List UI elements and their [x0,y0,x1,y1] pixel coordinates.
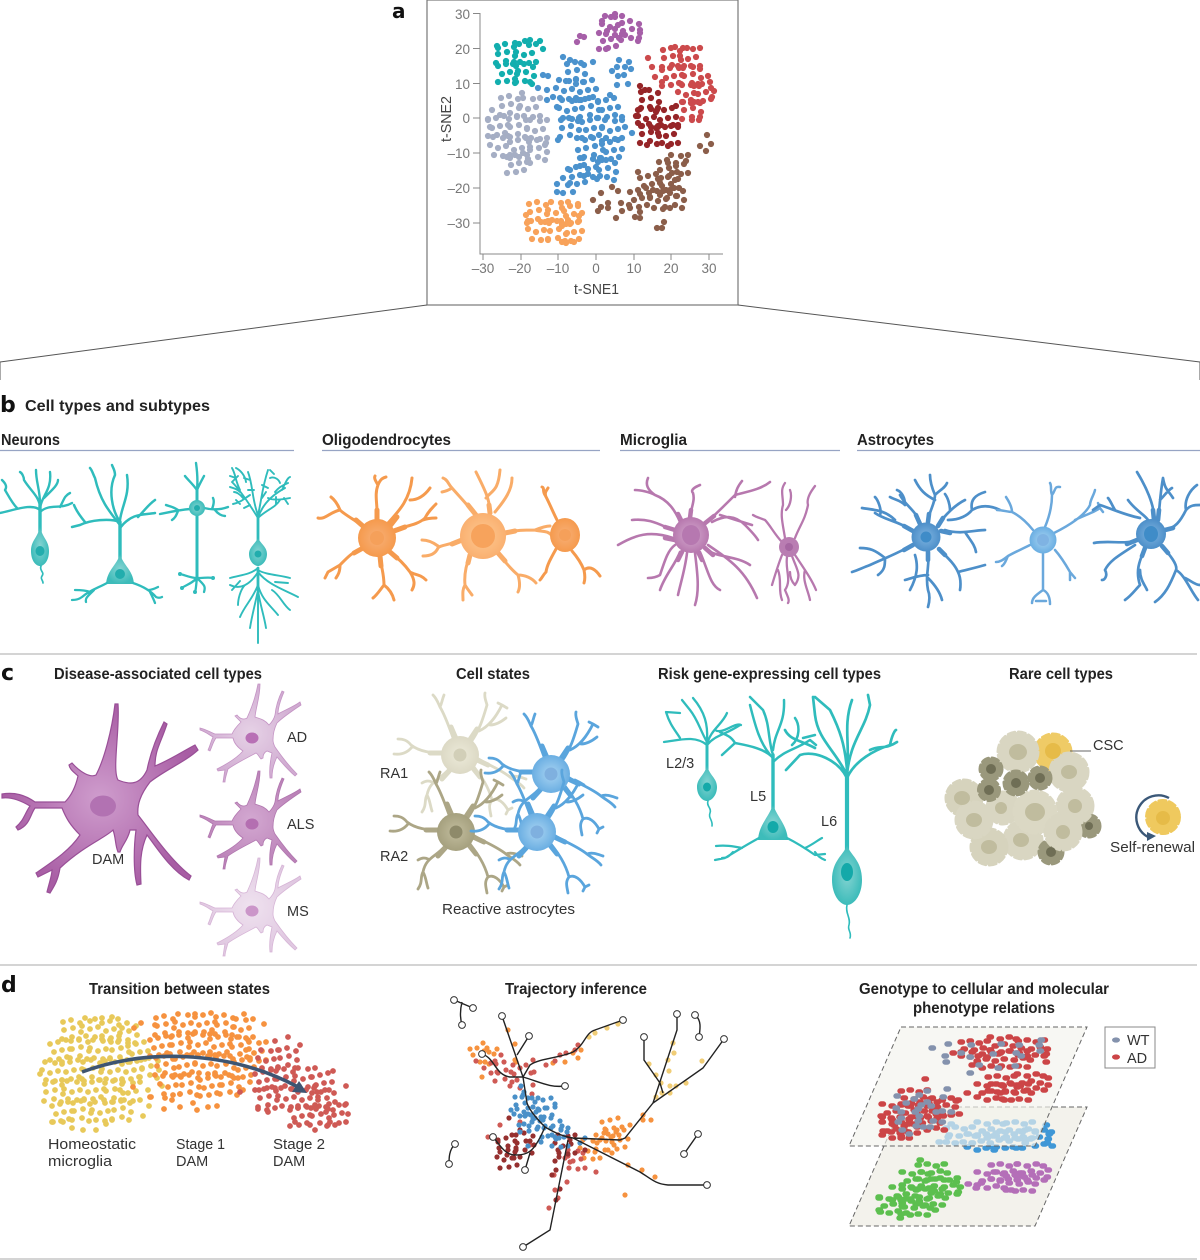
transition labels [48,1137,325,1170]
legend [1105,1027,1155,1068]
panel label b: b [0,393,16,418]
reactive astrocyte blue lower [471,770,603,893]
column headings: Oligodendrocytes [322,432,451,449]
reactive astrocyte RA1: RA1 [380,766,408,782]
neuron L6: L6 [821,814,837,830]
arrow [82,1056,307,1093]
plot frame [427,0,738,305]
axes: t-SNE1 [574,282,619,298]
trajectory lines [449,1000,724,1247]
column headings: Cell states [456,666,530,683]
transition scatter [40,1013,348,1130]
column headings: Disease-associated cell types [54,666,262,683]
yellow homeostatic dots [40,1017,162,1130]
neuron 1 [0,470,72,583]
transition labels: DAM [176,1154,208,1170]
axes: –30 [472,261,494,276]
column headings: Risk gene-expressing cell types [658,666,881,683]
panel d: transitions, trajectories, genotype [1,973,1155,1250]
axes: t-SNE2 [439,96,455,142]
panel label d: d [1,973,17,998]
oligodendrocyte 1 [318,476,436,600]
cluster brown [593,135,711,228]
column headings [54,666,1113,683]
oligodendrocyte 2 [422,470,552,600]
heading transition: Transition between states [89,981,270,998]
heading genotype: Genotype to cellular and molecular [859,981,1109,998]
bottom rule [0,1258,1197,1260]
trajectory end nodes [446,997,727,1250]
transition labels: microglia [48,1154,113,1170]
DAM cell: DAM [92,852,124,868]
column headings [0,432,1200,450]
cluster red [648,47,714,120]
legend: AD [1127,1051,1147,1067]
neuron L6 [785,695,897,938]
layered genotype planes [849,1027,1087,1226]
neuron L5 [715,697,825,860]
axes: 10 [455,77,470,92]
divider c-d [0,964,1197,966]
oligodendrocyte 3 [540,487,600,583]
cluster orange [526,202,582,243]
neuron 3 [160,463,228,592]
neuron L5: L5 [750,789,766,805]
reactive astrocyte RA1 [380,693,526,816]
transition labels: DAM [273,1154,305,1170]
purple cluster [967,1164,1050,1191]
axes: 20 [663,261,679,276]
divider b-c [0,653,1197,655]
axes: –20 [509,261,531,276]
cluster teal [496,40,543,84]
lower plane [849,1107,1087,1226]
green cluster [878,1160,962,1218]
orange stage 1 dots [133,1013,266,1110]
neuron 2 [72,465,162,603]
column headings: Astrocytes [857,432,934,449]
DAM cell [2,704,198,893]
blue cluster [938,1122,1054,1150]
axes: –30 [447,216,470,231]
cluster dark red [636,86,678,146]
reactive astrocyte RA2 [380,770,522,893]
astrocyte 1 [852,475,1000,607]
upper plane [849,1027,1087,1146]
astrocyte 3 [1093,472,1200,602]
heading: Cell types and subtypes [25,398,210,415]
panel a: t-SNE scatter plot [392,0,738,305]
axes: –10 [547,261,569,276]
reactive astrocyte blue upper [485,712,617,835]
transition labels: Stage 1 [176,1137,225,1153]
axes: 30 [701,261,717,276]
neuron L2/3: L2/3 [666,756,694,772]
MS cell: MS [287,904,309,920]
MS cell [200,858,309,956]
axes: 30 [455,7,470,22]
microglia 2 [753,483,816,603]
red stage 2 dots [240,1037,348,1130]
ALS cell: ALS [287,817,314,833]
label reactive astrocytes: Reactive astrocytes [442,902,575,918]
legend: WT [1127,1033,1150,1049]
self-renewal icon [1110,795,1195,856]
AD cell: AD [287,730,307,746]
self-renewal icon: Self-renewal [1110,840,1195,856]
panel c: disease and state cell types [1,661,1195,956]
cell dots [470,1024,702,1208]
neuron L2/3 [664,698,741,826]
panel label c: c [1,661,14,686]
gray WT dots [895,1040,1042,1134]
AD cell [200,684,307,782]
microglia 1 [618,478,770,605]
cluster purple [577,14,640,49]
heading genotype [859,981,1109,1017]
axes: –10 [447,146,470,161]
axes: –20 [447,181,470,196]
column headings: Neurons [1,432,60,449]
cluster gray [488,93,547,173]
heading trajectory: Trajectory inference [505,981,647,998]
scattered brown dots [593,135,711,218]
axes [439,7,723,298]
cluster blue [538,57,632,193]
axes: 20 [455,42,470,57]
red clusters AD [880,1037,1050,1138]
rare cell cluster [946,732,1124,865]
zoom connector lines [0,305,1200,380]
reactive astrocyte RA2: RA2 [380,849,408,865]
axes: 0 [592,261,600,276]
axes: 0 [462,111,470,126]
heading genotype: phenotype relations [913,1000,1055,1017]
ALS cell [200,771,314,869]
astrocyte 2 [996,483,1103,604]
transition labels: Homeostatic [48,1137,136,1153]
neuron 4 [230,468,298,643]
column headings: Rare cell types [1009,666,1113,683]
column headings: Microglia [620,432,687,449]
rare cell cluster: CSC [1093,738,1124,754]
axes: 10 [626,261,642,276]
trajectory plot [446,997,727,1250]
transition labels: Stage 2 [273,1137,325,1153]
panel b: cell types and subtypes [0,393,1200,643]
